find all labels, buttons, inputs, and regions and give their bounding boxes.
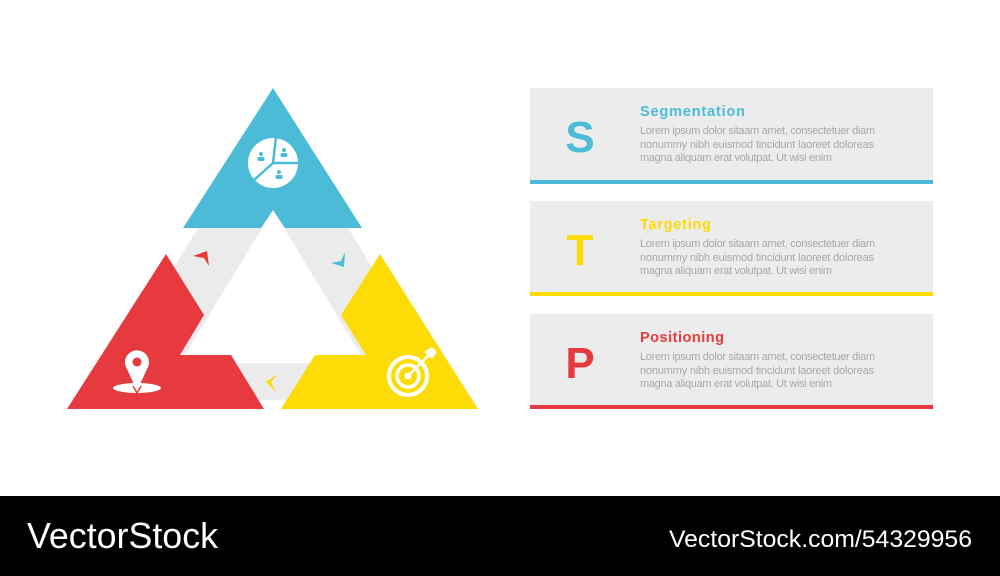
heading: Segmentation: Segmentation [640,104,745,120]
body text: Lorem ipsum dolor sitaam amet, consectetuer diam [640,125,875,137]
body text: Lorem ipsum dolor sitaam amet, consectetuer diam [640,351,875,363]
letter S: S [565,113,595,162]
body text: magna aliquam erat volutpat. Ut wisi enim [640,265,832,277]
icon: pie chart with people [248,137,299,188]
arrow: red chevron [193,251,209,266]
icon: target with dart [389,347,437,395]
letter P: P [565,339,595,388]
body text: Lorem ipsum dolor sitaam amet, consectetuer diam [640,238,875,250]
footer logo text: VectorStock [27,515,219,556]
body text: magna aliquam erat volutpat. Ut wisi enim [640,152,832,164]
arrow: blue chevron [331,252,345,267]
body text [640,125,875,164]
icon: location pin [113,350,161,393]
footer url text: VectorStock.com/54329956 [669,526,972,553]
heading: Positioning: Positioning [640,330,724,346]
heading: Targeting: Targeting [640,217,711,233]
body text: nonummy nibh euismod tincidunt laoreet doloreas [640,365,874,377]
letter T: T [567,226,594,275]
piece: red positioning triangle [67,254,264,409]
body text: magna aliquam erat volutpat. Ut wisi enim [640,378,832,390]
body text [640,351,875,390]
body text: nonummy nibh euismod tincidunt laoreet doloreas [640,252,874,264]
panel: targeting [530,201,933,296]
gray ring band [93,105,453,400]
panel: positioning [530,314,933,409]
piece: yellow targeting triangle [281,254,478,409]
arrow: yellow chevron [266,374,278,392]
piece: blue segmentation triangle [183,88,362,228]
diagram: STP triangle cycle [67,88,478,409]
body text: nonummy nibh euismod tincidunt laoreet doloreas [640,139,874,151]
footer bar [0,496,1000,576]
panel: segmentation [530,88,933,184]
body text [640,238,875,277]
